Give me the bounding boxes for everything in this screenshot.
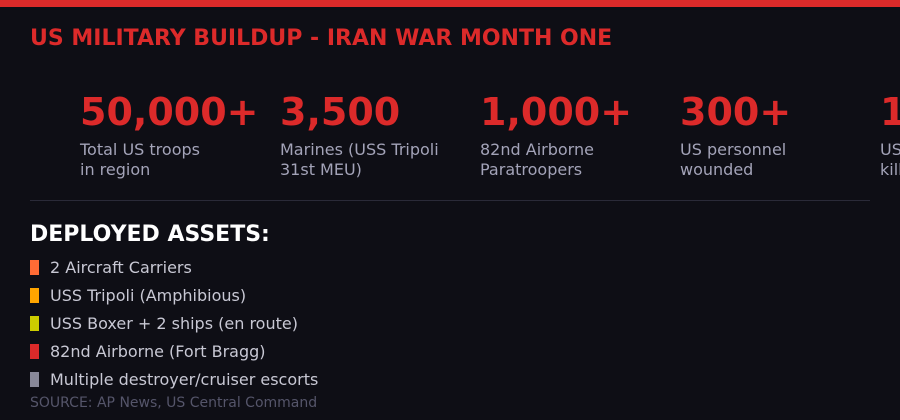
assets list: 2 Aircraft Carriers [50, 258, 192, 277]
stat: killed (clipped) [880, 90, 900, 179]
stat: wounded [680, 90, 791, 179]
source: SOURCE: AP News, US Central Command [30, 395, 317, 411]
stat: wounded: US personnel [680, 140, 786, 159]
stat: troops: 50,000+ [80, 90, 258, 134]
assets list: USS Tripoli (Amphibious) [50, 286, 246, 305]
top bar [0, 0, 900, 7]
stat: paratroopers: 1,000+ [480, 90, 632, 134]
assets list: USS Boxer + 2 ships (en route) [50, 314, 298, 333]
item: boxer [30, 314, 298, 333]
assets heading: DEPLOYED ASSETS: [30, 222, 270, 247]
stat: marines: 31st MEU) [280, 160, 362, 179]
stat: troops: in region [80, 160, 150, 179]
stat: wounded: 300+ [680, 90, 791, 134]
title: US MILITARY BUILDUP - IRAN WAR MONTH ONE [30, 26, 612, 51]
item: escorts [30, 370, 318, 389]
assets list: 82nd Airborne (Fort Bragg) [50, 342, 266, 361]
stat: marines: Marines (USS Tripoli [280, 140, 439, 159]
stat: troops: Total US troops [80, 140, 200, 159]
divider [30, 200, 870, 201]
stat: marines: 3,500 [280, 90, 400, 134]
stat: paratroopers [480, 90, 632, 179]
stat: paratroopers: 82nd Airborne [480, 140, 594, 159]
assets list: Multiple destroyer/cruiser escorts [50, 370, 318, 389]
stat: marines [280, 90, 439, 179]
assets list [30, 258, 318, 389]
stat: wounded: wounded [680, 160, 753, 179]
item: carriers [30, 258, 192, 277]
stat: troops [80, 90, 258, 179]
item: tripoli [30, 286, 246, 305]
item: 82nd [30, 342, 266, 361]
stat: paratroopers: Paratroopers [480, 160, 582, 179]
